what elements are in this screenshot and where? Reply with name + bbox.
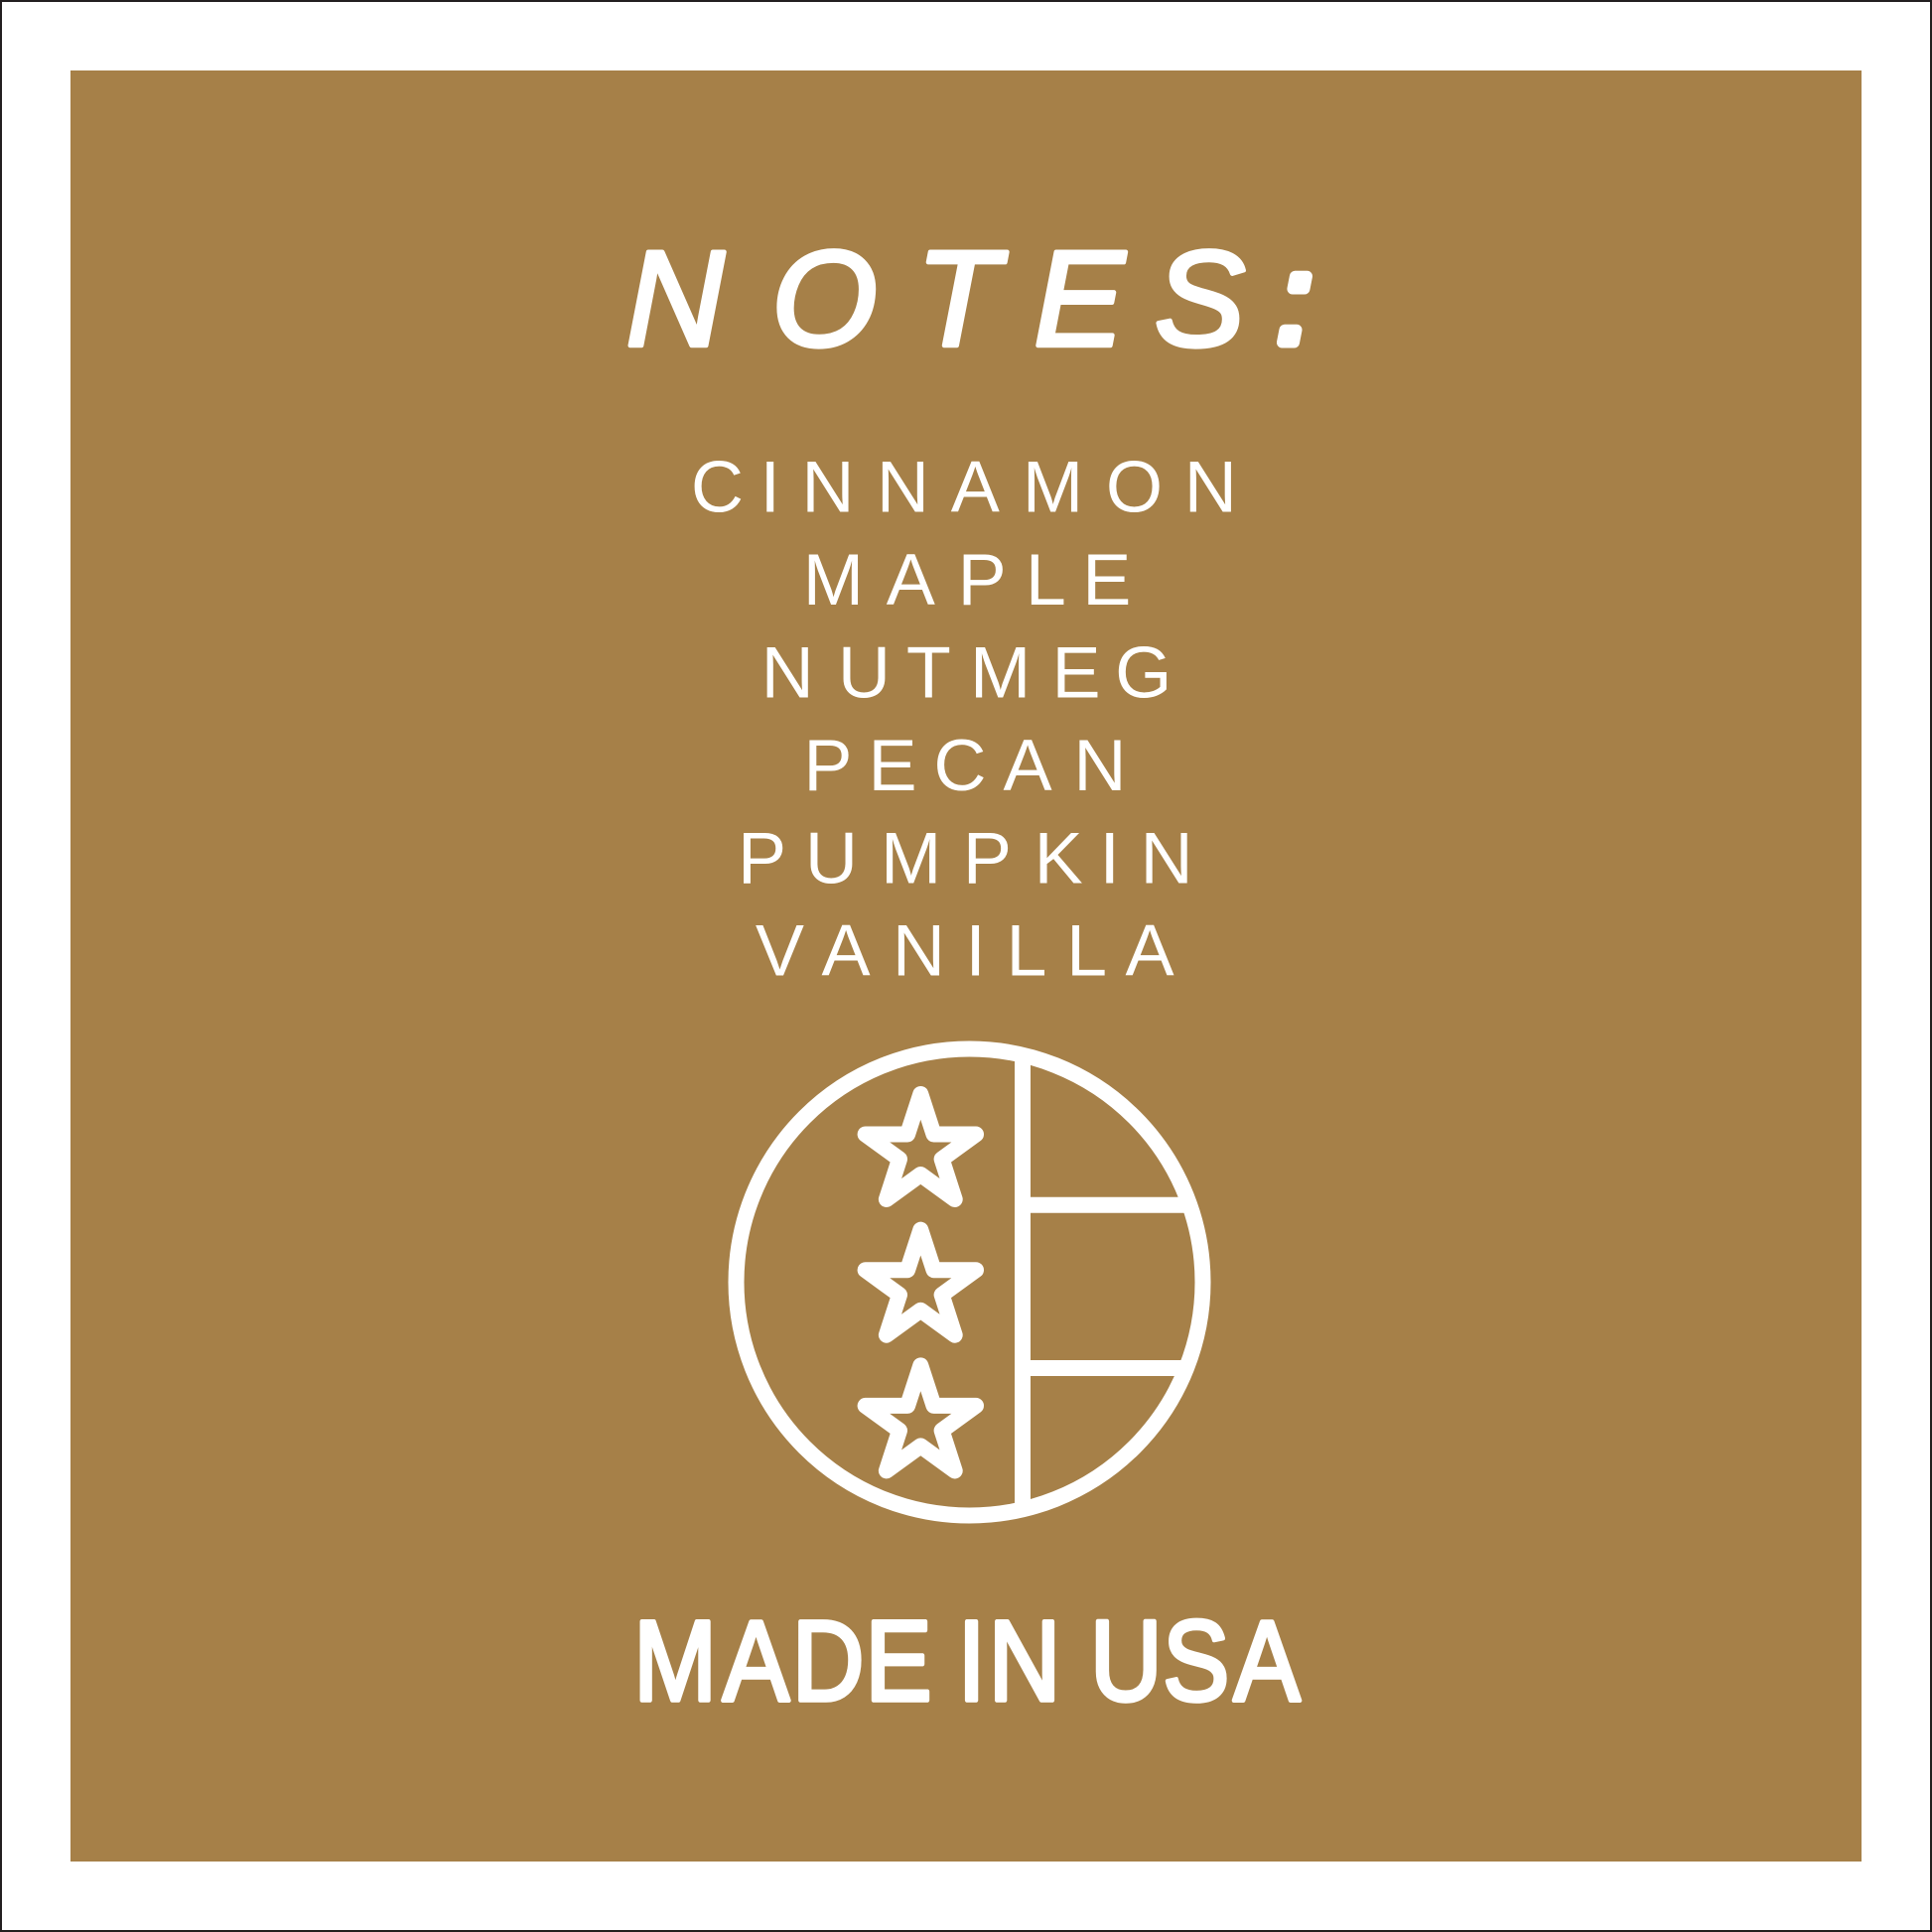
- flag stripes: [1023, 1055, 1189, 1509]
- note: maple: MAPLE: [803, 538, 1131, 621]
- title: notes: NOTES: [626, 223, 1245, 375]
- note: pumpkin: PUMPKIN: [738, 816, 1193, 898]
- star 2: [866, 1230, 976, 1335]
- note: cinnamon: CINNAMON: [691, 446, 1237, 528]
- star 1: [866, 1094, 976, 1199]
- note: nutmeg: NUTMEG: [761, 630, 1172, 713]
- three stars: [866, 1094, 976, 1470]
- flag circle outline: [737, 1048, 1203, 1515]
- label: made in usa: MADE IN USA: [633, 1596, 1301, 1725]
- star 3: [866, 1365, 976, 1470]
- note: pecan: PECAN: [803, 724, 1127, 806]
- icon: american flag badge: [737, 1048, 1203, 1515]
- note: vanilla: VANILLA: [756, 909, 1174, 992]
- title: notes: :: [1277, 229, 1312, 369]
- list of flavor notes: [691, 446, 1237, 992]
